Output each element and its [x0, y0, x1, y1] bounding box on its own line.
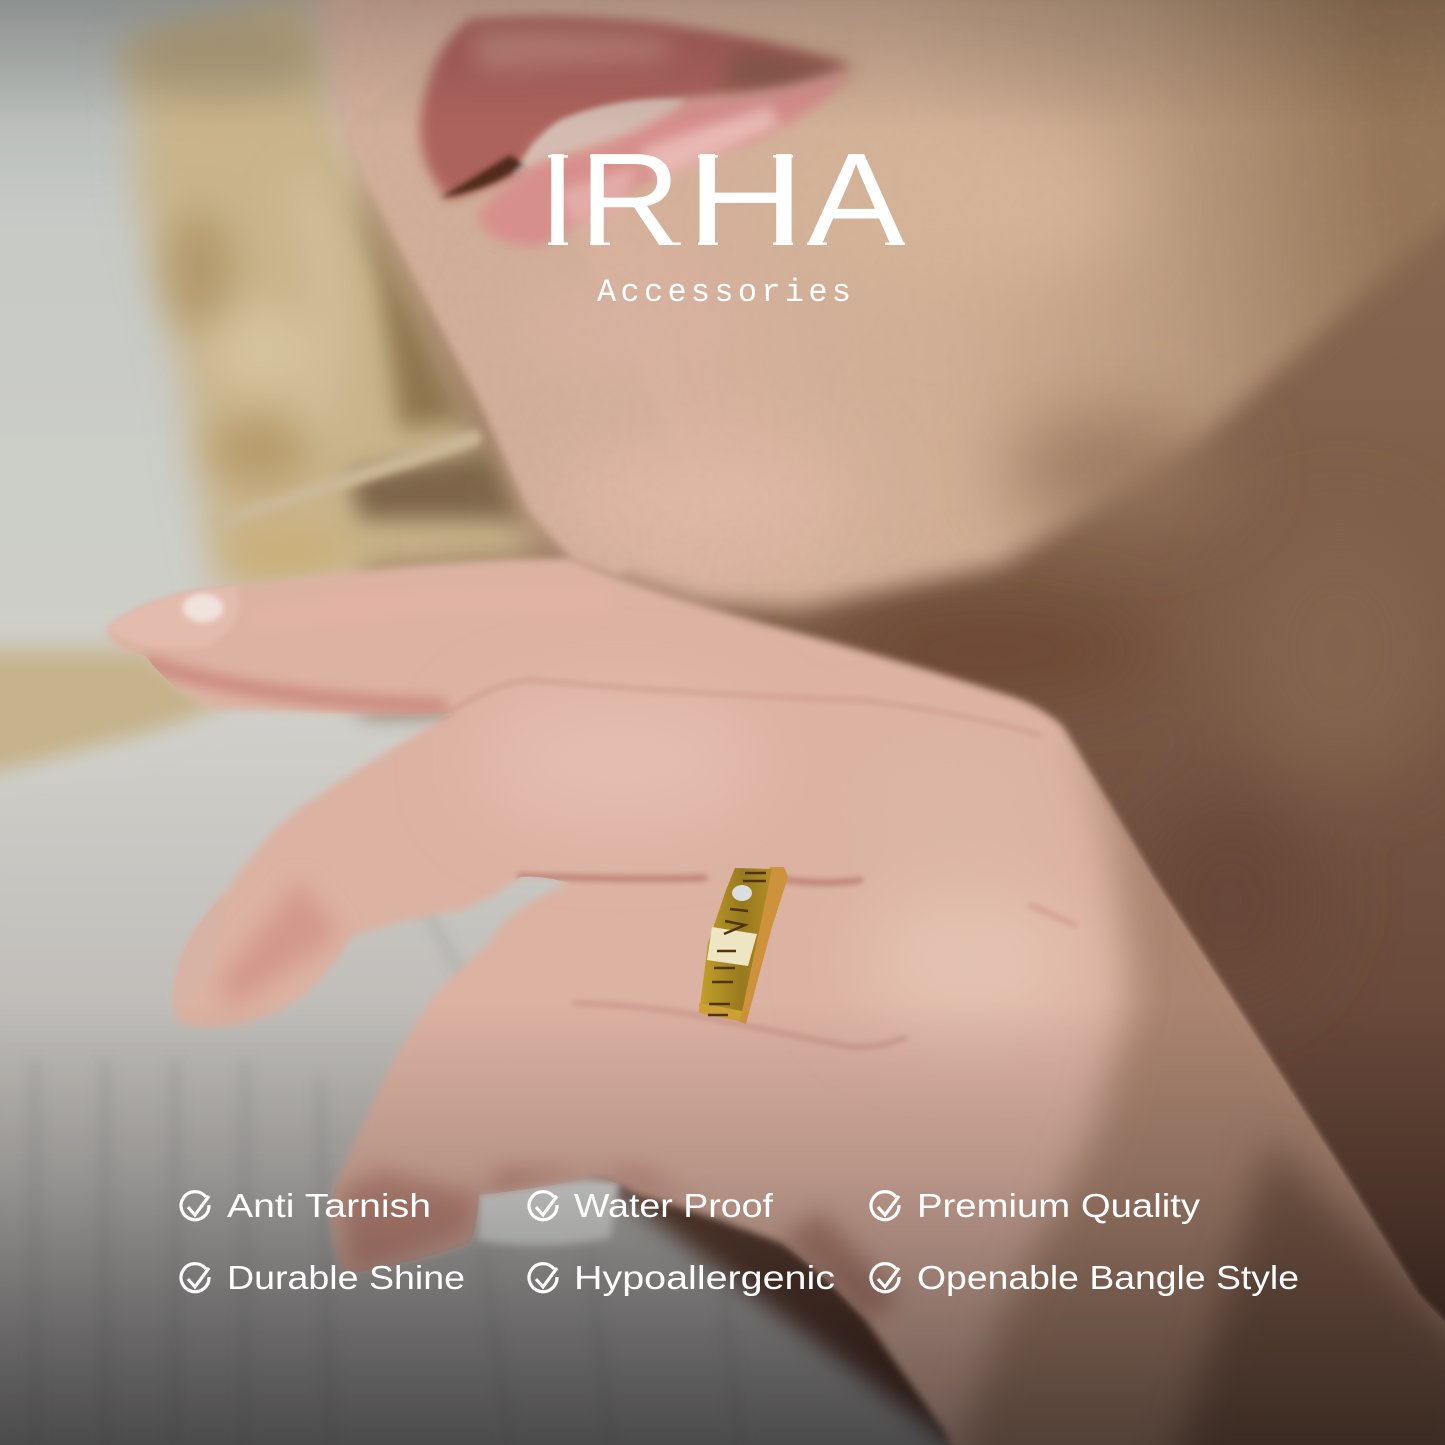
roman numeral engravings — [708, 873, 766, 1015]
brand title — [539, 126, 905, 273]
skin texture — [0, 0, 1445, 620]
wrist tone — [950, 720, 1445, 1445]
feature: Openable Bangle Style: Openable Bangle Style — [917, 1259, 1299, 1296]
hand mass and wrist — [107, 558, 1445, 1445]
ring band — [699, 868, 772, 1021]
feature: Water Proof: Water Proof — [574, 1187, 774, 1224]
ring outer side — [738, 867, 788, 1024]
feature: Anti Tarnish: Anti Tarnish — [227, 1187, 431, 1224]
brand title: I — [539, 126, 576, 273]
ring highlights — [707, 927, 757, 966]
lower lip — [478, 72, 853, 246]
darker wrist edge — [1170, 1140, 1445, 1445]
sweater ribs — [35, 900, 740, 1445]
hand — [107, 558, 1445, 1445]
blonde hair — [0, 0, 555, 785]
hair mass — [130, 0, 555, 590]
feature: Anti Tarnish — [181, 1187, 431, 1224]
lower lip highlights — [560, 105, 780, 225]
upper lip highlight — [470, 28, 853, 90]
bright knuckles — [514, 708, 1066, 1025]
teeth and mouth shadow — [440, 99, 687, 198]
feature: Durable Shine: Durable Shine — [227, 1259, 465, 1296]
face tones — [510, 110, 1230, 560]
lower hair — [0, 650, 230, 785]
subtitle: Accessories — [597, 274, 851, 311]
upper lip — [420, 17, 853, 200]
finger shading — [220, 880, 900, 1320]
feature: Hypoallergenic: Hypoallergenic — [574, 1259, 835, 1296]
face — [310, 0, 1445, 608]
hair shadow along jaw — [345, 170, 530, 520]
index finger underside — [143, 652, 450, 714]
hair wisp — [218, 438, 474, 522]
hand tones — [107, 586, 1445, 1445]
lips — [420, 17, 853, 246]
diamond — [732, 885, 752, 901]
brand title: A — [807, 126, 905, 273]
bottom darkening — [0, 1000, 1445, 1445]
ring — [699, 867, 788, 1024]
feature list — [181, 1187, 1299, 1296]
nails — [107, 586, 239, 1020]
sweater — [0, 712, 1000, 1445]
top darkening — [0, 0, 1445, 130]
finger gaps — [440, 680, 1075, 1047]
jaw edge left — [340, 40, 700, 575]
brand title: R — [579, 126, 681, 273]
neck shadows — [820, 520, 1445, 1000]
sweater light band under hand — [478, 1180, 620, 1246]
brand title: H — [686, 126, 805, 273]
hair strands — [120, 24, 360, 577]
grey wall background — [0, 0, 360, 840]
feature: Premium Quality: Premium Quality — [917, 1187, 1201, 1224]
